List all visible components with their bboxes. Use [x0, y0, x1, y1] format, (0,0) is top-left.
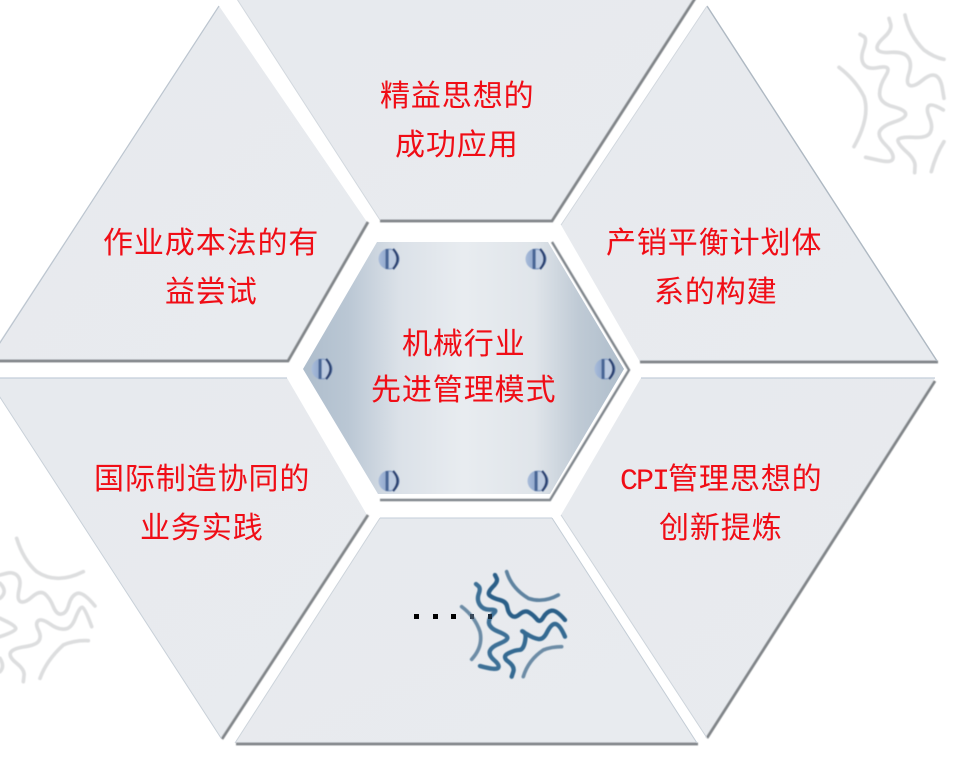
- icon: bolt right: [594, 358, 616, 380]
- text: central title: 先进管理模式: [371, 374, 556, 407]
- panel: top 精益思想的成功应用: [235, 0, 696, 221]
- text: lower left panel label: 业务实践: [140, 512, 264, 545]
- text: central title: 机械行业: [402, 328, 526, 361]
- icon: blue squiggle logo: [462, 572, 565, 677]
- text: upper left panel label: 作业成本法的有: [103, 227, 319, 260]
- text: lower right panel label: CPI管理思想的: [620, 463, 823, 499]
- icon: bolt bottom right: [528, 470, 548, 492]
- panel: central hexagon 机械行业先进管理模式: [303, 242, 629, 500]
- panel: lower right CPI管理思想的创新提炼: [561, 378, 935, 738]
- panel: upper left 作业成本法的有益尝试: [0, 6, 368, 361]
- panel: bottom with ellipsis and logo: [235, 518, 698, 744]
- text: upper right panel label: 产销平衡计划体: [606, 227, 822, 260]
- icon: bolt top right: [526, 248, 546, 270]
- text: top panel label: 成功应用: [395, 129, 519, 162]
- text: upper left panel label: 益尝试: [165, 276, 258, 309]
- text: ellipsis dots: [414, 614, 492, 619]
- icon: bolt bottom left: [378, 470, 400, 492]
- decoration: grey squiggle top right: [839, 15, 944, 173]
- icon: bolt left: [312, 358, 332, 380]
- text: top panel label: 精益思想的: [380, 80, 534, 113]
- text: lower left panel label: 国际制造协同的: [94, 463, 310, 496]
- text: upper right panel label: 系的构建: [654, 276, 778, 309]
- panel: upper right 产销平衡计划体系的构建: [561, 6, 938, 362]
- panel: lower left 国际制造协同的业务实践: [0, 378, 368, 739]
- text: lower right panel label: 创新提炼: [659, 512, 783, 545]
- decoration: grey squiggle bottom left: [0, 538, 95, 682]
- icon: bolt top left: [378, 248, 400, 270]
